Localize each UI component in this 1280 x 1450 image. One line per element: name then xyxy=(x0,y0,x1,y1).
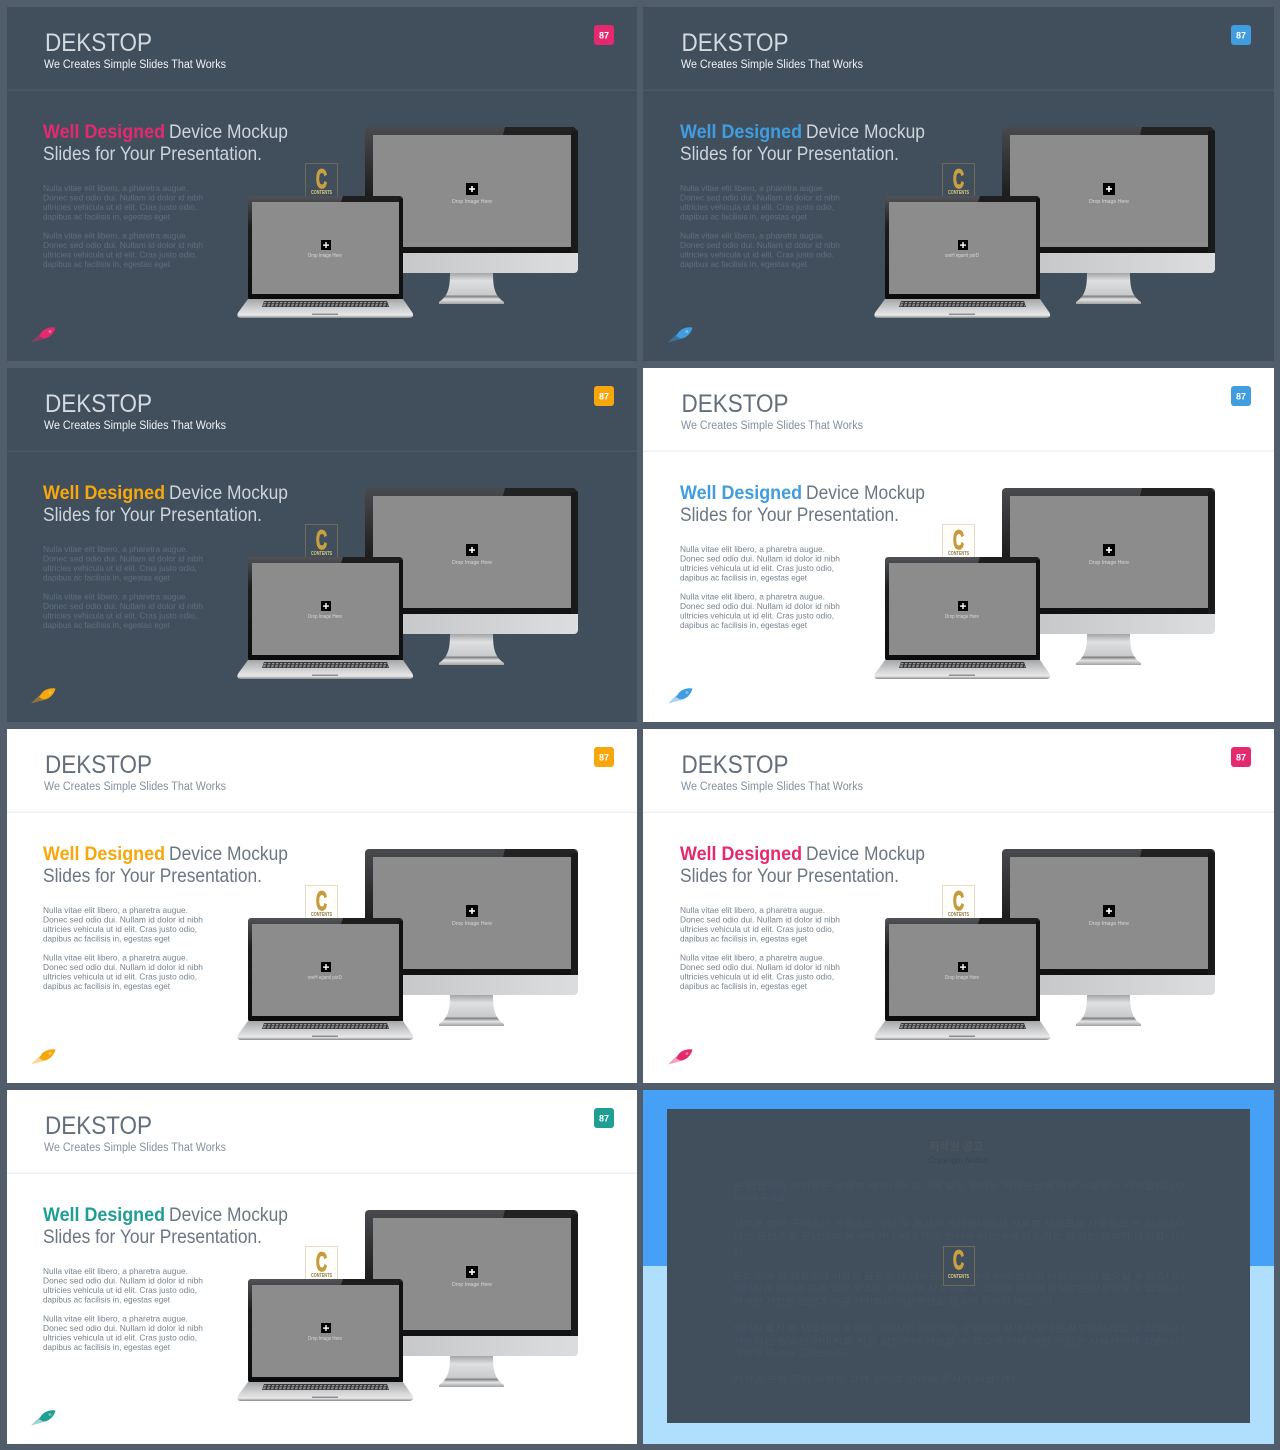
body text: Donec sed odio dui. Nullam id dolor id nibh xyxy=(43,1323,203,1333)
body text: Nulla vitae elit libero, a pharetra augue. xyxy=(43,905,188,915)
body text xyxy=(680,544,840,630)
body text: Donec sed odio dui. Nullam id dolor id nibh xyxy=(680,962,840,972)
copyright body text: 감사 xyxy=(733,1246,743,1256)
body text: Nulla vitae elit libero, a pharetra augue. xyxy=(43,544,188,554)
monitor mockup xyxy=(365,488,578,665)
logo badge: CONTENTS xyxy=(948,912,970,918)
title: DEKSTOP xyxy=(682,29,788,57)
icon: rocket xyxy=(31,327,56,342)
body text: Nulla vitae elit libero, a pharetra augue. xyxy=(680,592,825,602)
body text: ultricies vehicula ut id elit. Cras justo odio, xyxy=(680,610,834,620)
body text xyxy=(680,183,840,269)
panel: dark slide, blue accent xyxy=(643,7,1274,361)
page badge xyxy=(594,25,614,45)
body text: Nulla vitae elit libero, a pharetra augue. xyxy=(43,1266,188,1276)
copyright body text: 자세한 사항은 콘텐츠 제공 사이트의 이용약관을 참고해 주시기 바랍니다 xyxy=(733,1296,1054,1306)
page badge: 87 xyxy=(599,752,609,762)
heading: Device Mockup xyxy=(806,482,925,504)
page badge xyxy=(1231,747,1251,767)
page badge: 87 xyxy=(1236,30,1246,40)
logo badge: CONTENTS xyxy=(311,190,333,196)
page badge xyxy=(594,1108,614,1128)
logo badge: CONTENTS xyxy=(948,551,970,557)
subtitle: We Creates Simple Slides That Works xyxy=(44,59,226,71)
logo badge xyxy=(942,524,974,562)
body text: dapibus ac facilisis in, egestas eget xyxy=(680,212,808,222)
body text: ultricies vehicula ut id elit. Cras justo odio, xyxy=(680,563,834,573)
body text: dapibus ac facilisis in, egestas eget xyxy=(43,1342,171,1352)
heading: Device Mockup xyxy=(806,121,925,143)
body text: ultricies vehicula ut id elit. Cras justo odio, xyxy=(43,202,197,212)
logo badge: CONTENTS xyxy=(948,1274,970,1280)
panel: dark slide, orange accent xyxy=(7,368,637,722)
body text: ultricies vehicula ut id elit. Cras justo odio, xyxy=(680,202,834,212)
heading: Well Designed xyxy=(43,1204,165,1226)
page badge xyxy=(1231,25,1251,45)
logo badge: CONTENTS xyxy=(311,1273,333,1279)
panel: light slide, teal accent xyxy=(7,1090,637,1444)
subtitle: We Creates Simple Slides That Works xyxy=(44,420,226,432)
page badge: 87 xyxy=(599,30,609,40)
body text: Nulla vitae elit libero, a pharetra augue. xyxy=(43,1314,188,1324)
heading: Device Mockup xyxy=(169,1204,288,1226)
subtitle: We Creates Simple Slides That Works xyxy=(44,781,226,793)
body text: Donec sed odio dui. Nullam id dolor id nibh xyxy=(680,554,840,564)
copyright title xyxy=(928,1139,988,1165)
heading xyxy=(43,843,288,887)
laptop mockup: Drop Image Here xyxy=(308,1336,342,1342)
laptop mockup xyxy=(237,557,413,679)
body text: Donec sed odio dui. Nullam id dolor id nibh xyxy=(680,914,840,924)
body text: dapibus ac facilisis in, egestas eget xyxy=(680,934,808,944)
heading xyxy=(43,482,288,526)
icon: rocket xyxy=(668,688,692,704)
body text: Donec sed odio dui. Nullam id dolor id nibh xyxy=(43,601,203,611)
body text: dapibus ac facilisis in, egestas eget xyxy=(680,981,808,991)
body text xyxy=(43,1266,203,1352)
logo badge xyxy=(306,1246,338,1284)
body text xyxy=(43,544,203,630)
heading: Well Designed xyxy=(680,121,802,143)
heading: Slides for Your Presentation. xyxy=(43,143,262,165)
icon: rocket xyxy=(668,1049,692,1064)
body text: dapibus ac facilisis in, egestas eget xyxy=(43,981,171,991)
panel: light slide, orange accent xyxy=(7,729,637,1083)
body text: dapibus ac facilisis in, egestas eget xyxy=(680,572,808,582)
body text: ultricies vehicula ut id elit. Cras justo odio, xyxy=(680,972,834,982)
page badge: 87 xyxy=(1236,392,1246,402)
heading: Device Mockup xyxy=(169,843,288,865)
title: DEKSTOP xyxy=(45,1112,152,1140)
monitor mockup: Drop Image Here xyxy=(452,921,492,927)
heading: Device Mockup xyxy=(806,843,925,865)
heading: Well Designed xyxy=(43,843,165,865)
copyright body text xyxy=(733,1181,1186,1384)
logo badge xyxy=(306,164,338,202)
copyright body text: 저작권 관련 문의 사항은 고객 센터로 연락해 주시기 바랍니다 xyxy=(733,1374,1017,1384)
body text: Nulla vitae elit libero, a pharetra augue. xyxy=(43,952,188,962)
body text: dapibus ac facilisis in, egestas eget xyxy=(43,934,171,944)
body text: Nulla vitae elit libero, a pharetra augue. xyxy=(43,592,188,602)
body text: Nulla vitae elit libero, a pharetra augue. xyxy=(680,544,825,554)
heading: Device Mockup xyxy=(169,121,288,143)
body text: dapibus ac facilisis in, egestas eget xyxy=(680,620,808,630)
monitor mockup: Drop Image Here xyxy=(1089,560,1129,566)
logo badge: C xyxy=(316,1247,327,1277)
monitor mockup xyxy=(1002,849,1215,1026)
body text: Donec sed odio dui. Nullam id dolor id nibh xyxy=(43,554,203,564)
icon: rocket xyxy=(31,688,56,704)
heading xyxy=(680,843,925,887)
body text: dapibus ac facilisis in, egestas eget xyxy=(680,259,808,269)
copyright body text: 이미지 출처 본 템플릿에 포함된 이미지는 미리보기 용도이며 실제 파일에는 포함되지 않을 수 있습니다 xyxy=(733,1323,1186,1333)
logo badge xyxy=(942,164,974,202)
title: DEKSTOP xyxy=(682,390,788,418)
copyright body text: 저작권 안내 구매하신 콘텐츠는 개인 및 회사의 프레젠테이션 자료로 자유롭게 사용하실 수 있습니다 xyxy=(733,1218,1186,1228)
page badge xyxy=(594,747,614,767)
logo badge: CONTENTS xyxy=(311,551,333,557)
icon: rocket xyxy=(668,327,692,342)
copyright body text: 다만 콘텐츠를 무단으로 복제하거나 배포하는 행위와 타인에게 양도하는 행위는 엄격히 금지됩니다 xyxy=(733,1231,1186,1241)
monitor mockup xyxy=(1002,488,1215,665)
heading: Slides for Your Presentation. xyxy=(43,1226,262,1248)
heading: Slides for Your Presentation. xyxy=(680,865,899,887)
body text: Nulla vitae elit libero, a pharetra augue. xyxy=(680,230,825,240)
heading: Slides for Your Presentation. xyxy=(680,143,899,165)
body text: Donec sed odio dui. Nullam id dolor id nibh xyxy=(680,240,840,250)
body text: Nulla vitae elit libero, a pharetra augue. xyxy=(680,952,825,962)
body text: ultricies vehicula ut id elit. Cras justo odio, xyxy=(43,1285,197,1295)
copyright body text: 본 템플릿의 저작권은 콘텐츠 제작사에 있으며 모든 권리는 저작권법에 의해 보호받는 저작물입니다 xyxy=(733,1181,1186,1191)
title: DEKSTOP xyxy=(45,29,152,57)
heading: Slides for Your Presentation. xyxy=(43,504,262,526)
logo badge: C xyxy=(953,164,964,194)
laptop mockup xyxy=(237,196,413,318)
body text: dapibus ac facilisis in, egestas eget xyxy=(43,259,171,269)
copyright body text: 폰트 정보 본 템플릿에 사용된 글꼴은 각 저작권자의 정책에 따라 별도의 사용 허가가 필요할 수 있습니다 xyxy=(733,1271,1186,1281)
laptop mockup xyxy=(874,196,1050,318)
laptop mockup: oreH egamI porD xyxy=(308,975,342,981)
subtitle: We Creates Simple Slides That Works xyxy=(681,420,863,432)
heading: Well Designed xyxy=(43,482,165,504)
panel: light slide, pink accent xyxy=(643,729,1274,1083)
body text: ultricies vehicula ut id elit. Cras justo odio, xyxy=(43,924,197,934)
body text: dapibus ac facilisis in, egestas eget xyxy=(43,572,171,582)
body text: Nulla vitae elit libero, a pharetra augue. xyxy=(43,230,188,240)
body text: Donec sed odio dui. Nullam id dolor id nibh xyxy=(43,192,203,202)
logo badge xyxy=(944,1245,974,1286)
heading xyxy=(43,1204,288,1248)
panel: copyright notice xyxy=(643,1090,1274,1444)
page badge: 87 xyxy=(599,392,609,402)
body text: Nulla vitae elit libero, a pharetra augue. xyxy=(680,183,825,193)
copyright body text: 이용해 주셔서 감사합니다 xyxy=(733,1348,849,1358)
logo badge xyxy=(306,524,338,562)
monitor mockup xyxy=(365,1210,578,1387)
heading xyxy=(680,121,925,165)
body text: Donec sed odio dui. Nullam id dolor id nibh xyxy=(680,601,840,611)
monitor mockup: Drop Image Here xyxy=(1089,921,1129,927)
laptop mockup xyxy=(874,918,1050,1040)
icon: rocket xyxy=(31,1410,56,1426)
body text: dapibus ac facilisis in, egestas eget xyxy=(43,1294,171,1304)
copyright body text: 이미지와 아이콘 등의 일부 요소는 교체하여 사용하실 수 있으며 재판매 용도로는 사용하실 수 없습니다 xyxy=(733,1283,1186,1293)
page badge: 87 xyxy=(599,1114,609,1124)
title: DEKSTOP xyxy=(45,751,152,779)
title: DEKSTOP xyxy=(682,751,788,779)
laptop mockup: Drop Image Here xyxy=(945,614,979,620)
logo badge: C xyxy=(953,1245,964,1275)
body text: Donec sed odio dui. Nullam id dolor id nibh xyxy=(43,1276,203,1286)
body text: ultricies vehicula ut id elit. Cras justo odio, xyxy=(43,610,197,620)
copyright title: 저작권 공고 xyxy=(929,1139,983,1153)
logo badge xyxy=(306,886,338,924)
body text: Donec sed odio dui. Nullam id dolor id nibh xyxy=(680,192,840,202)
monitor mockup xyxy=(365,849,578,1026)
heading: Well Designed xyxy=(680,482,802,504)
heading xyxy=(680,482,925,526)
monitor mockup: Drop Image Here xyxy=(1089,199,1129,205)
body text xyxy=(43,905,203,991)
body text: Nulla vitae elit libero, a pharetra augue. xyxy=(43,183,188,193)
logo badge: C xyxy=(953,525,964,555)
body text: ultricies vehicula ut id elit. Cras justo odio, xyxy=(680,250,834,260)
title: DEKSTOP xyxy=(45,390,152,418)
page badge xyxy=(1231,386,1251,406)
laptop mockup xyxy=(237,1279,413,1401)
subtitle: We Creates Simple Slides That Works xyxy=(681,59,863,71)
laptop mockup: Drop Image Here xyxy=(308,614,342,620)
body text: ultricies vehicula ut id elit. Cras justo odio, xyxy=(43,972,197,982)
logo badge: CONTENTS xyxy=(311,912,333,918)
body text: Donec sed odio dui. Nullam id dolor id nibh xyxy=(43,962,203,972)
heading: Slides for Your Presentation. xyxy=(680,504,899,526)
copyright body text: 사용자는 필요한 이미지를 직접 삽입하여 사용할 수 있으며 이에 대한 책임은 사용자에게 있습니다 xyxy=(733,1336,1186,1346)
logo badge: C xyxy=(316,886,327,916)
body text: Nulla vitae elit libero, a pharetra augue. xyxy=(680,905,825,915)
body text xyxy=(680,905,840,991)
copyright body text: 사용해 주세요 xyxy=(733,1193,785,1203)
laptop mockup: oreH egamI porD xyxy=(945,253,979,259)
body text: ultricies vehicula ut id elit. Cras justo odio, xyxy=(43,250,197,260)
monitor mockup: Drop Image Here xyxy=(452,560,492,566)
logo badge xyxy=(942,886,974,924)
monitor mockup xyxy=(1002,127,1215,304)
monitor mockup: Drop Image Here xyxy=(452,199,492,205)
heading: Well Designed xyxy=(43,121,165,143)
panel: dark slide, pink accent xyxy=(7,7,637,361)
logo badge: C xyxy=(953,886,964,916)
icon: rocket xyxy=(31,1049,56,1064)
panel: light slide, blue accent xyxy=(643,368,1274,722)
subtitle: We Creates Simple Slides That Works xyxy=(681,781,863,793)
body text: ultricies vehicula ut id elit. Cras justo odio, xyxy=(43,1332,197,1342)
heading: Slides for Your Presentation. xyxy=(43,865,262,887)
laptop mockup: Drop Image Here xyxy=(308,253,342,259)
heading: Device Mockup xyxy=(169,482,288,504)
laptop mockup xyxy=(874,557,1050,679)
logo badge: CONTENTS xyxy=(948,190,970,196)
body text xyxy=(43,183,203,269)
logo badge: C xyxy=(316,164,327,194)
copyright title: Copyright Notice xyxy=(928,1156,988,1165)
laptop mockup: Drop Image Here xyxy=(945,975,979,981)
heading xyxy=(43,121,288,165)
monitor mockup: Drop Image Here xyxy=(452,1282,492,1288)
body text: dapibus ac facilisis in, egestas eget xyxy=(43,212,171,222)
body text: ultricies vehicula ut id elit. Cras justo odio, xyxy=(680,924,834,934)
page badge xyxy=(594,386,614,406)
subtitle: We Creates Simple Slides That Works xyxy=(44,1142,226,1154)
heading: Well Designed xyxy=(680,843,802,865)
body text: Donec sed odio dui. Nullam id dolor id nibh xyxy=(43,914,203,924)
logo badge: C xyxy=(316,525,327,555)
page badge: 87 xyxy=(1236,752,1246,762)
laptop mockup xyxy=(237,918,413,1040)
body text: Donec sed odio dui. Nullam id dolor id nibh xyxy=(43,240,203,250)
body text: dapibus ac facilisis in, egestas eget xyxy=(43,620,171,630)
body text: ultricies vehicula ut id elit. Cras justo odio, xyxy=(43,563,197,573)
monitor mockup xyxy=(365,127,578,304)
